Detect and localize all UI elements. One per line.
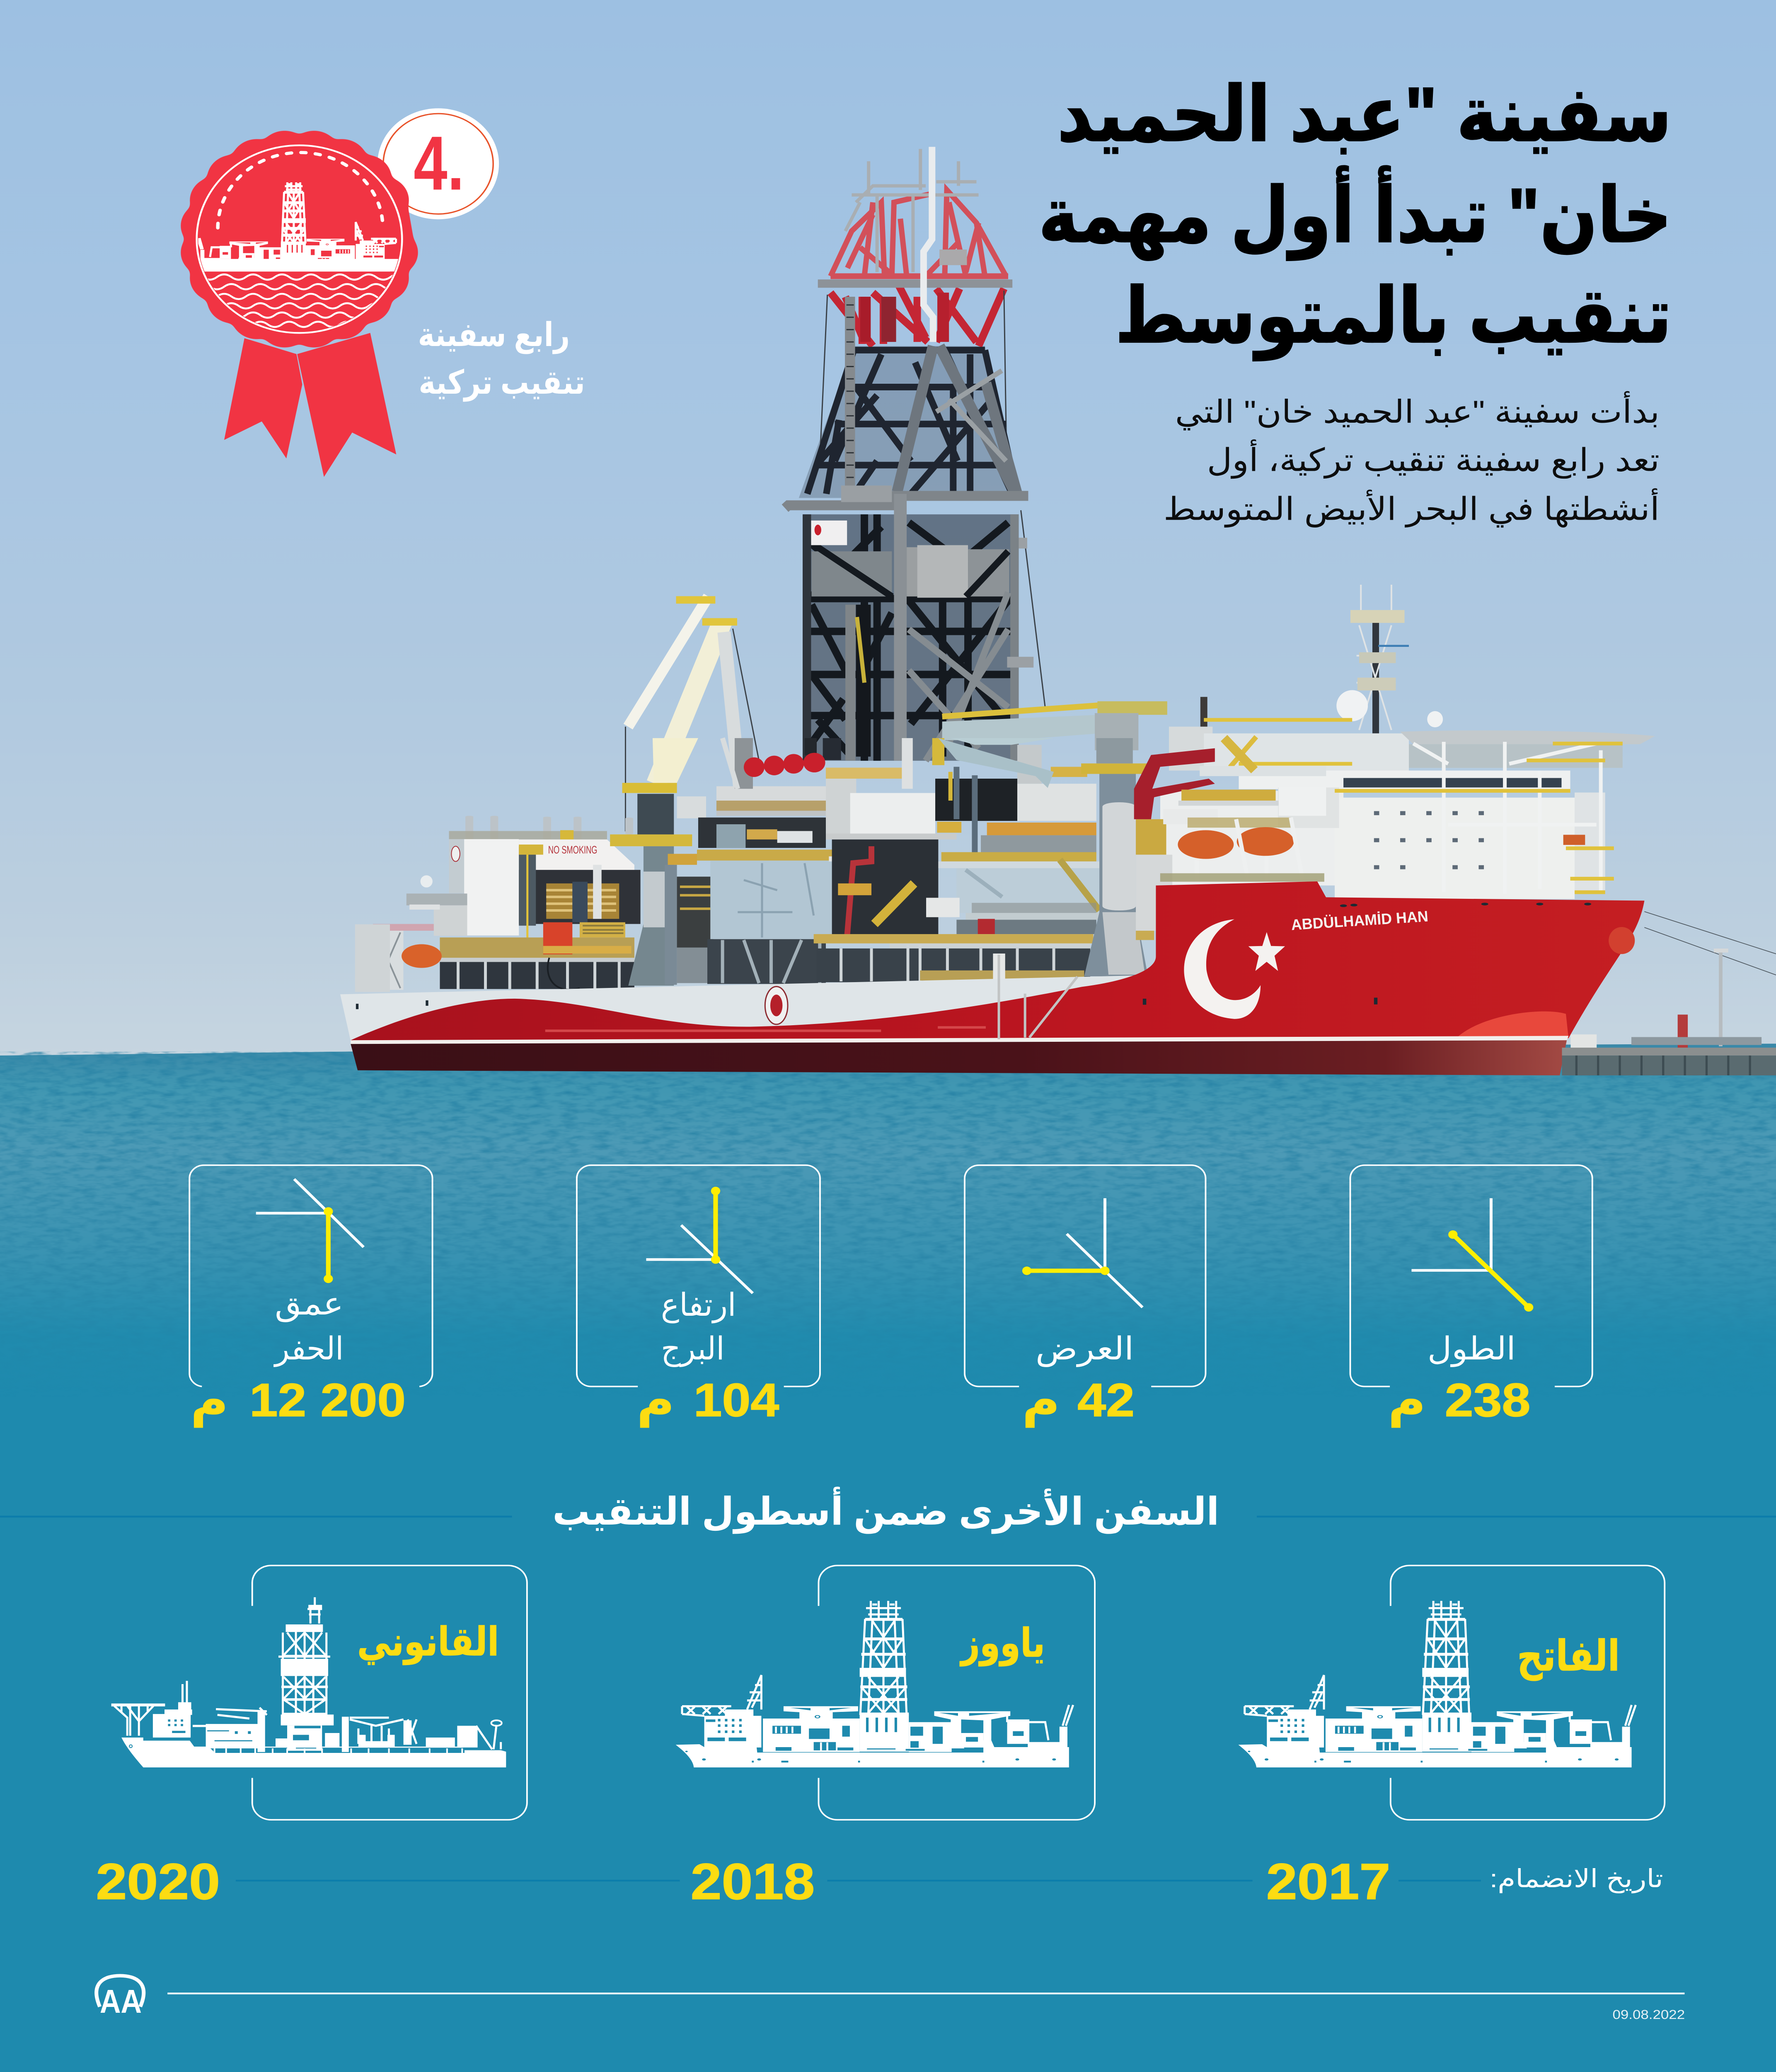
stern block bbox=[373, 830, 641, 990]
section heading: other fleet ships: السفن الأخرى ضمن أسطول التنقيب bbox=[552, 1486, 1219, 1534]
dashed arc bbox=[218, 152, 383, 228]
badge caption bbox=[418, 316, 585, 402]
footer: agency logo bbox=[97, 1976, 144, 2020]
timeline: date joined: 2020 bbox=[96, 1853, 220, 1910]
stat: length: م bbox=[1388, 1373, 1426, 1428]
fleet card: Fatih bbox=[1238, 1566, 1665, 1820]
forward column bbox=[1081, 738, 1172, 976]
background: sea bbox=[0, 1043, 1776, 1316]
ship name on hull: ABDÜLHAMİD HAN bbox=[1290, 908, 1429, 934]
blue-grey central module bbox=[668, 850, 865, 984]
Turkish flag crescent bbox=[1184, 919, 1261, 1019]
stat: drilling depth: 12 200 bbox=[249, 1374, 406, 1426]
stern funnels bbox=[465, 816, 633, 840]
TP hull emblem bbox=[765, 987, 788, 1024]
timeline: date joined: 2018 bbox=[691, 1853, 815, 1910]
intro text: تعد رابع سفينة تنقيب تركية، أول bbox=[1207, 439, 1660, 479]
stat: width: م bbox=[1022, 1373, 1060, 1428]
stat: length bbox=[1350, 1165, 1592, 1428]
red hose reels bbox=[744, 753, 825, 777]
stat: derrick height: 104 bbox=[694, 1374, 779, 1426]
stern lower deck bbox=[440, 922, 634, 990]
radar mast bbox=[1200, 585, 1443, 733]
ribbon left bbox=[224, 338, 302, 458]
badge waves bbox=[208, 274, 393, 328]
forward module bbox=[814, 835, 1099, 1002]
module stack top bbox=[653, 738, 956, 848]
stat: derrick height: البرج bbox=[661, 1331, 725, 1367]
Turkish flag star bbox=[1249, 932, 1285, 971]
photo: midship modules, columns and deck equipment bbox=[373, 738, 1326, 1002]
central dark zone bbox=[832, 738, 1096, 939]
background: sky bbox=[0, 0, 1776, 1057]
footer date: 09.08.2022 bbox=[1613, 2008, 1685, 2022]
red knuckle crane bbox=[1134, 748, 1215, 819]
stat: drilling depth: عمق bbox=[275, 1285, 344, 1322]
badge caption: تنقيب تركية bbox=[419, 364, 585, 402]
crane booms bbox=[625, 597, 759, 831]
ribbon right bbox=[297, 333, 396, 477]
fleet card: Kanuni: القانوني bbox=[357, 1620, 499, 1665]
photo: drilling ship derrick bbox=[785, 147, 1045, 761]
timeline: date joined: 2017 bbox=[1266, 1853, 1390, 1910]
footer rule bbox=[167, 1992, 1684, 1995]
title bbox=[1038, 72, 1672, 361]
stat: width: 42 bbox=[1077, 1374, 1135, 1426]
stat: length: الطول bbox=[1428, 1331, 1516, 1367]
fleet card: Fatih: الفاتح bbox=[1517, 1632, 1620, 1681]
badge caption: رابع سفينة bbox=[418, 316, 570, 354]
stat: drilling depth: م bbox=[190, 1373, 228, 1428]
timeline: date joined bbox=[96, 1853, 1663, 1910]
gantry top deck bbox=[942, 701, 1167, 750]
footer: agency logo: AA bbox=[100, 1982, 142, 2020]
fleet card: Kanuni bbox=[111, 1566, 527, 1820]
timeline: date joined: تاريخ الانضمام: bbox=[1490, 1865, 1663, 1893]
aft column bbox=[628, 846, 674, 985]
stat: drilling depth bbox=[189, 1165, 433, 1428]
intro text: أنشطتها في البحر الأبيض المتوسط bbox=[1164, 488, 1660, 528]
section heading: other fleet ships bbox=[0, 1486, 1776, 1534]
intro text: بدأت سفينة "عبد الحميد خان" التي bbox=[1175, 391, 1660, 431]
stat: derrick height: م bbox=[636, 1373, 675, 1428]
number circle: 4. bbox=[414, 121, 464, 206]
badge ship bbox=[195, 182, 405, 271]
fleet card: Yavuz: ياووز bbox=[959, 1621, 1045, 1667]
aft deck ring bbox=[610, 835, 692, 846]
intro text bbox=[1164, 391, 1660, 528]
fleet card: Yavuz bbox=[676, 1566, 1095, 1820]
no smoking sign: NO SMOKING bbox=[548, 844, 597, 856]
harbour quay bbox=[1562, 912, 1776, 1075]
badge: fourth drilling ship rosette bbox=[181, 108, 499, 477]
stat: drilling depth: الحفر bbox=[273, 1331, 344, 1367]
stat: width bbox=[965, 1165, 1205, 1428]
rosette bbox=[181, 131, 418, 348]
photo: ship mast, crane booms and bridge bbox=[625, 585, 1655, 899]
stat: length: 238 bbox=[1445, 1374, 1530, 1426]
upper deck rails and lifeboats bbox=[1160, 738, 1326, 882]
bridge superstructure bbox=[1160, 720, 1655, 899]
stat: derrick height bbox=[577, 1165, 820, 1428]
number circle bbox=[377, 108, 499, 219]
orange lifeboat stern bbox=[402, 944, 442, 968]
stat: derrick height: ارتفاع bbox=[661, 1287, 736, 1324]
stat: width: العرض bbox=[1036, 1331, 1134, 1367]
ring bbox=[197, 145, 402, 333]
gantry arm bbox=[938, 738, 1054, 788]
photo: ship hull bbox=[340, 881, 1644, 1075]
